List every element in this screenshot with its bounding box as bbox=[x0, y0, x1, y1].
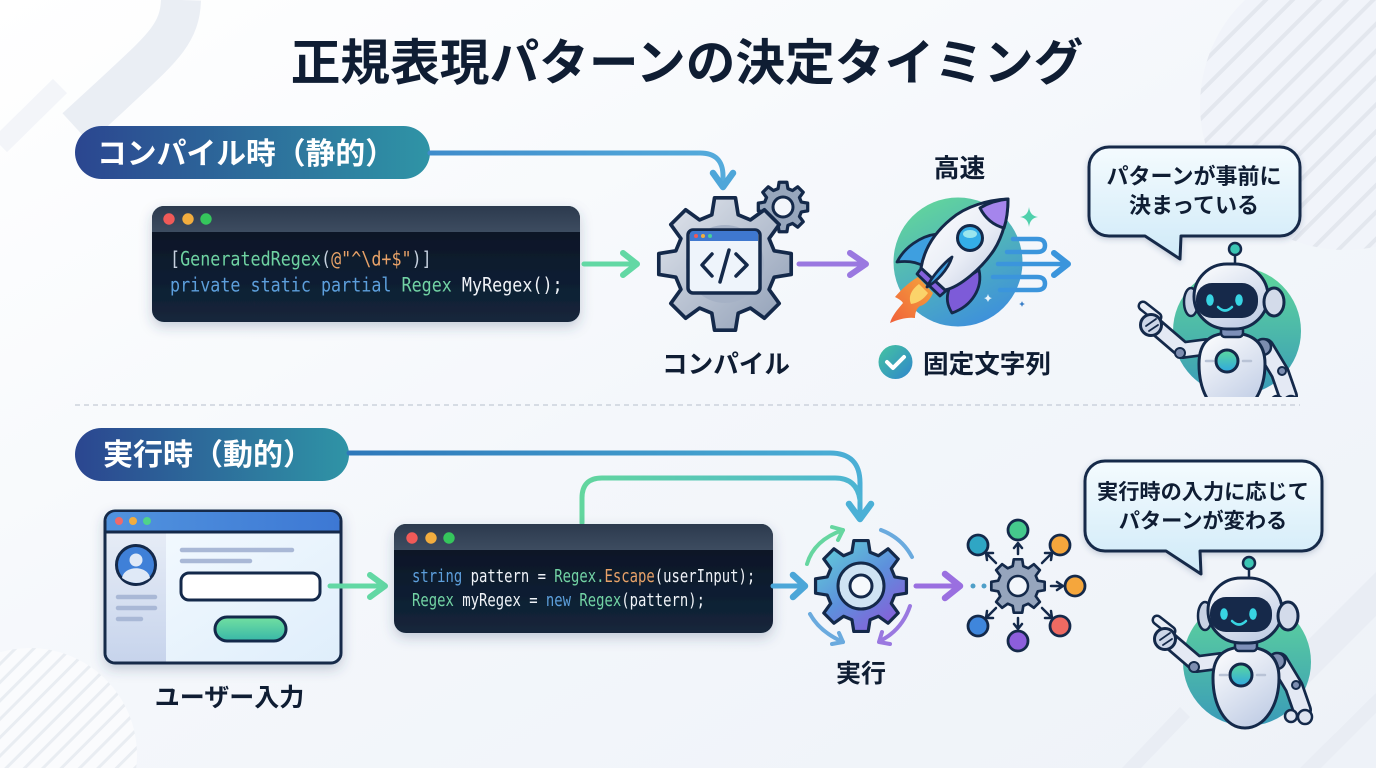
code panel: dynamic regex: Regex myRegex = new Regex(pattern); bbox=[412, 589, 705, 610]
input field bbox=[181, 573, 320, 600]
arrow: compiler to fast bbox=[799, 253, 866, 275]
speech bubble: pattern decided in advance bbox=[1089, 147, 1300, 259]
arrow: input to code bbox=[330, 575, 385, 597]
section heading: run time (dynamic): 実行時（動的） bbox=[103, 439, 313, 472]
section heading: run time (dynamic) bbox=[75, 428, 349, 481]
icon: robot (top) bbox=[1140, 243, 1301, 414]
submit button bbox=[215, 617, 286, 641]
speech bubble: pattern decided in advance: 決まっている bbox=[1129, 193, 1259, 218]
divider bbox=[75, 404, 1300, 406]
icon: robot (bottom) bbox=[1154, 557, 1312, 728]
speech bubble: pattern changes with input: パターンが変わる bbox=[1119, 508, 1287, 533]
code panel: static regex: private static partial Regex MyRegex(); bbox=[170, 274, 563, 297]
label: compile: コンパイル bbox=[662, 350, 790, 379]
icon: pattern network bbox=[968, 520, 1085, 651]
label: user input: ユーザー入力 bbox=[155, 684, 304, 712]
icon: rocket bbox=[890, 198, 1068, 326]
arrow: run heading to execution gear bbox=[349, 453, 860, 514]
label: fast: 高速 bbox=[934, 154, 985, 183]
speech bubble: pattern changes with input bbox=[1085, 461, 1322, 574]
section heading: compile time (static): コンパイル時（静的） bbox=[97, 138, 395, 171]
speech bubble: pattern decided in advance: パターンが事前に bbox=[1107, 164, 1281, 189]
code panel: dynamic regex: string pattern = Regex.Escape(userInput); bbox=[412, 565, 755, 586]
code panel: dynamic regex bbox=[394, 524, 773, 633]
arrow: compile heading to compiler gear bbox=[430, 153, 733, 187]
speech bubble: pattern changes with input: 実行時の入力に応じて bbox=[1097, 480, 1309, 504]
code panel: static regex bbox=[152, 206, 580, 322]
avatar bbox=[116, 546, 156, 584]
code panel: static regex: [GeneratedRegex(@"^\d+$")] bbox=[170, 248, 432, 271]
icon: execution gear with cycle arrows bbox=[807, 527, 912, 644]
section heading: compile time (static) bbox=[75, 126, 430, 179]
title: 正規表現パターンの決定タイミング bbox=[291, 35, 1083, 91]
arrow: code to execution bbox=[773, 575, 805, 597]
arrow: execution to branching patterns bbox=[916, 574, 960, 598]
icon: check badge bbox=[878, 345, 912, 379]
browser window: user input bbox=[105, 511, 341, 663]
arrow: code to compiler bbox=[584, 253, 637, 275]
label: execution: 実行 bbox=[836, 660, 886, 688]
label: fixed string: 固定文字列 bbox=[923, 350, 1051, 379]
icon: compiler gear bbox=[659, 182, 808, 330]
arrow: code panel to execution gear bbox=[582, 478, 871, 523]
